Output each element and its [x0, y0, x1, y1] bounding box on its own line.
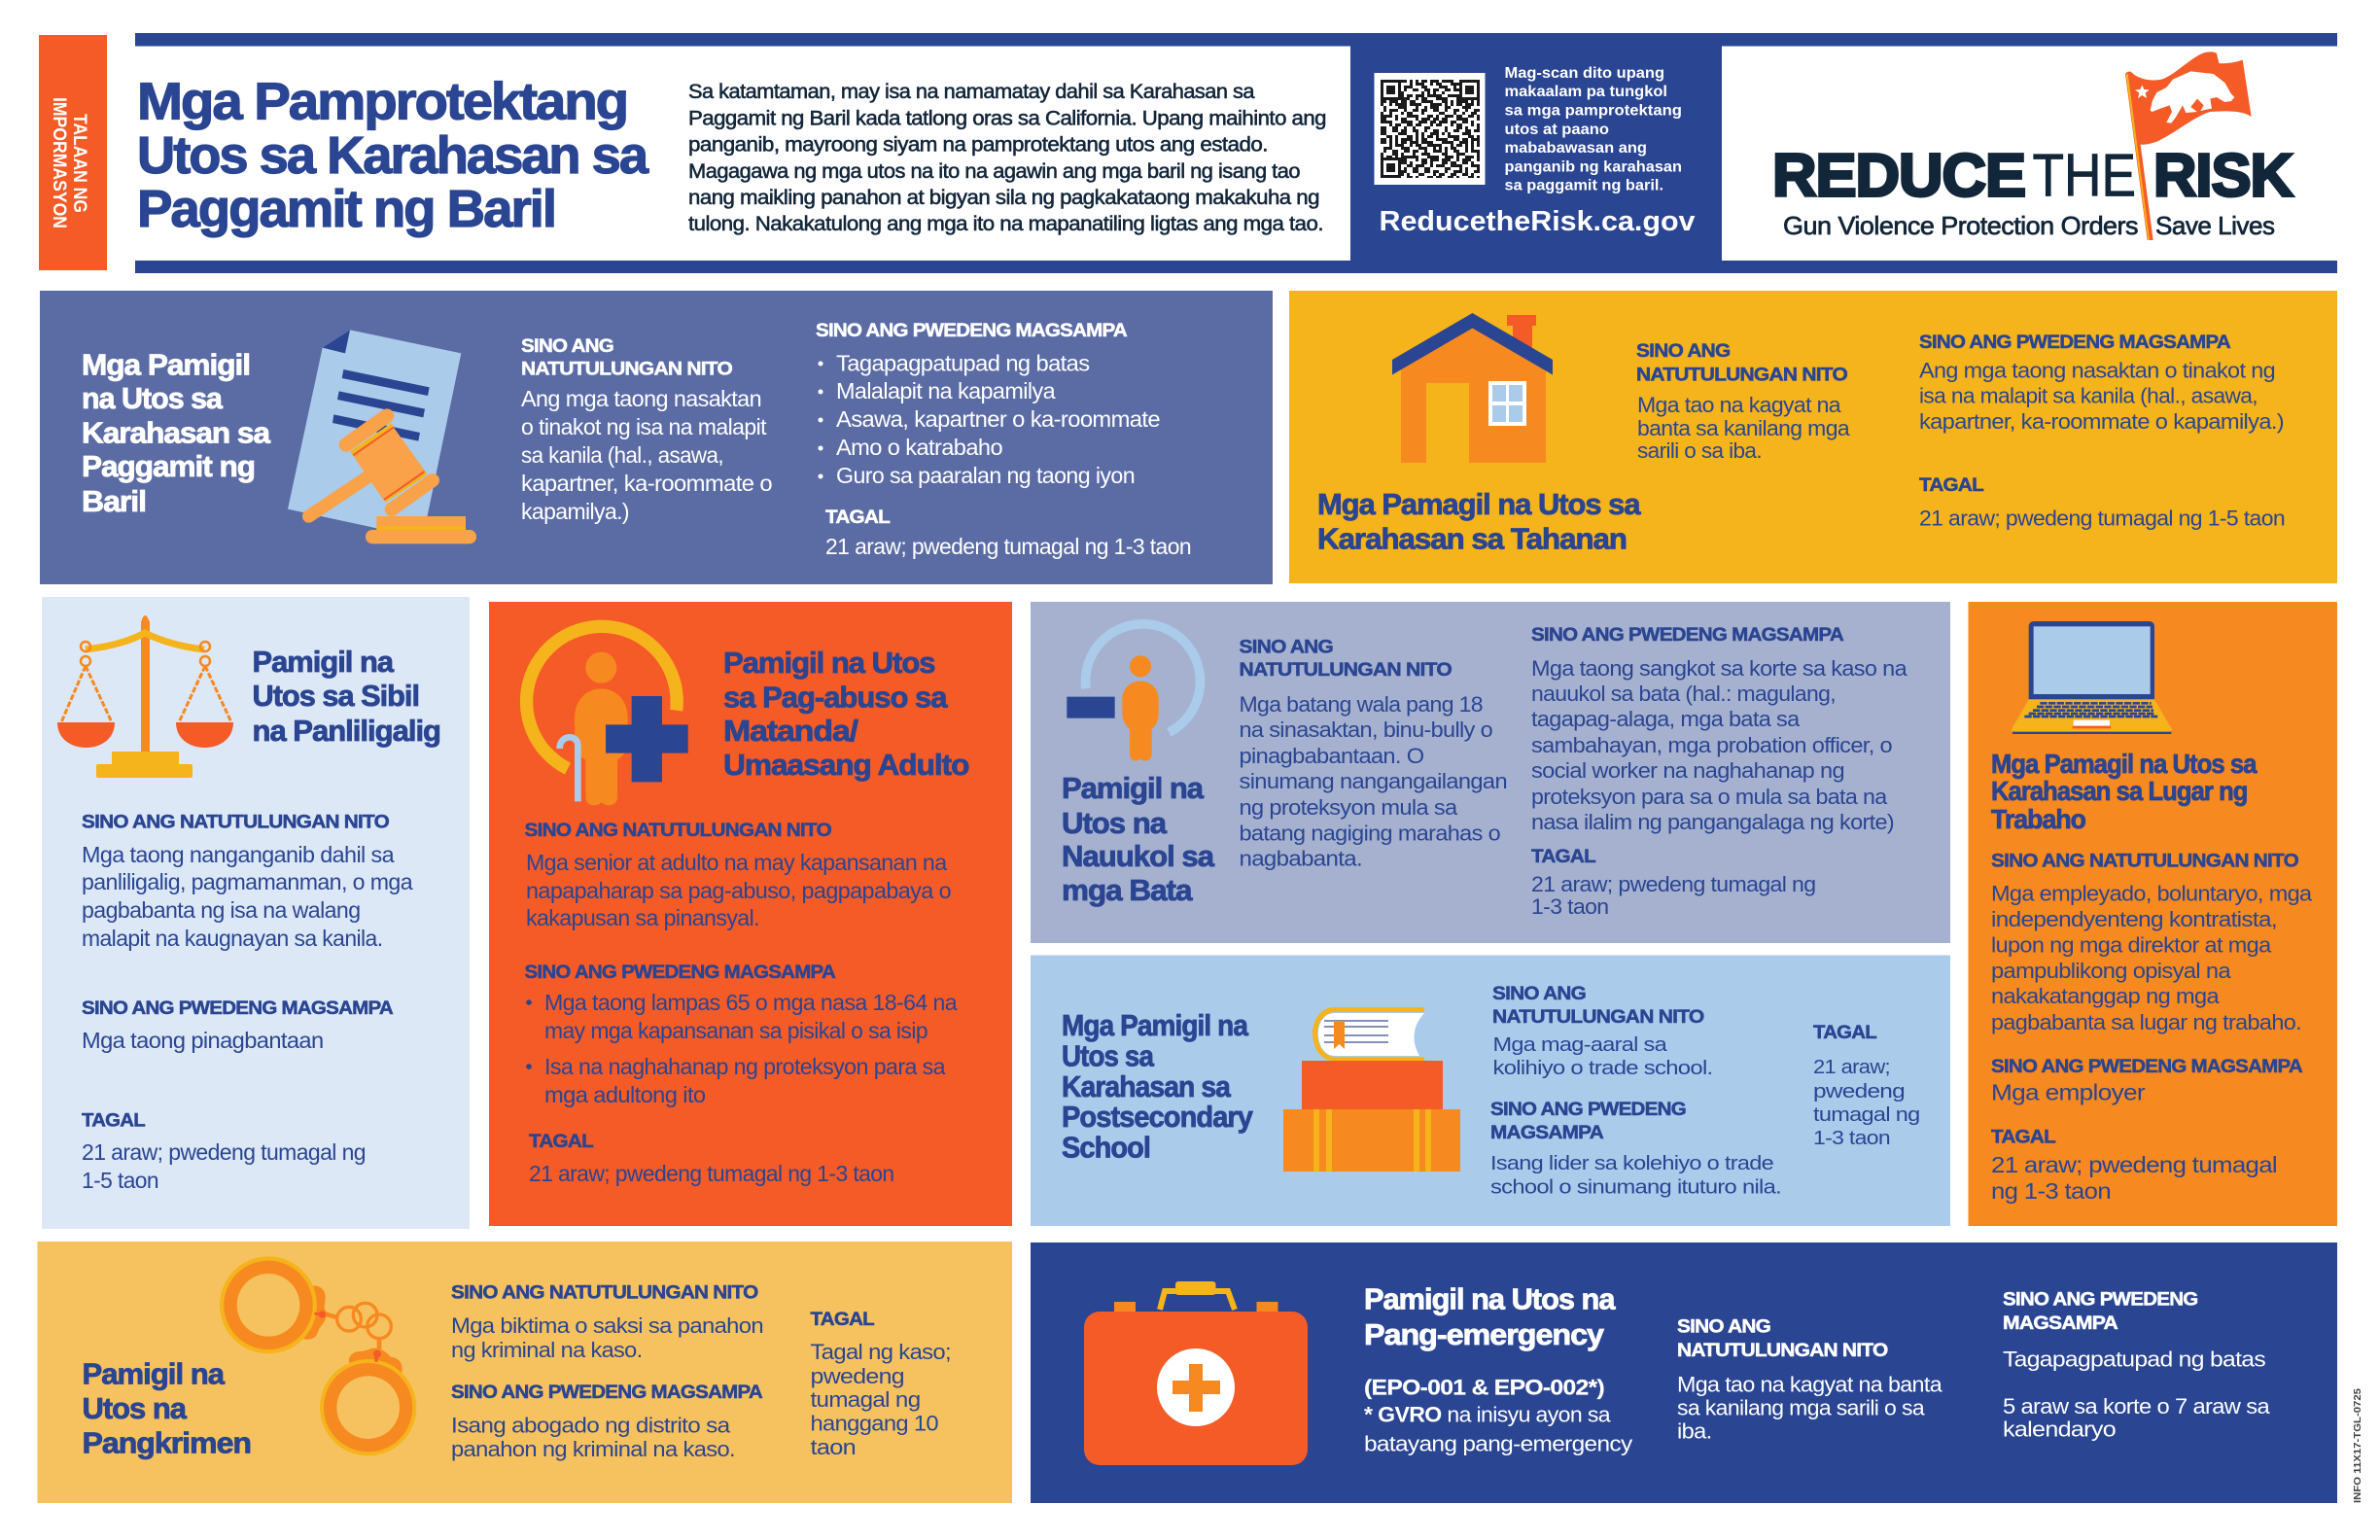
who it helps: ng proteksyon mula sa — [1239, 795, 1458, 820]
QR instructions: makaalam pa tungkol — [1505, 84, 1667, 100]
who can file: MAGSAMPA — [1490, 1122, 1604, 1143]
tab: document type: IMPORMASYON — [49, 97, 69, 228]
duration: pwedeng — [811, 1364, 904, 1388]
duration: Tagal ng kaso; — [811, 1340, 951, 1364]
duration: TAGAL — [1919, 474, 1984, 496]
panel: QR call to action — [1350, 33, 1722, 273]
panel: juvenile restraining order — [1031, 602, 1950, 943]
icon: document and gavel — [288, 330, 476, 543]
duration: TAGAL — [82, 1110, 146, 1132]
who can file — [2003, 1289, 2266, 1371]
website URL: ReducetheRisk.ca.gov — [1379, 206, 1696, 237]
duration — [811, 1309, 951, 1459]
duration — [1919, 474, 2285, 531]
icon: handcuffs — [220, 1256, 416, 1455]
duration: taon — [811, 1435, 856, 1459]
duration: TAGAL — [825, 507, 891, 528]
heading: Pamigil na — [253, 645, 395, 679]
who it helps: Mga taong nanganganib dahil sa — [82, 842, 396, 867]
duration: pwedeng — [1813, 1080, 1905, 1102]
who can file — [1531, 624, 1908, 834]
who can file — [816, 320, 1161, 488]
QR instructions — [1505, 65, 1682, 194]
who can file: sambahayan, mga probation officer, o — [1531, 733, 1892, 757]
who it helps: sa kanilang mga sarili o sa — [1677, 1396, 1925, 1419]
tab: document type: TALAAN NG — [69, 114, 89, 213]
who it helps: Mga biktima o saksi sa panahon — [451, 1313, 763, 1338]
duration: tumagal ng — [1813, 1103, 1920, 1126]
heading — [723, 646, 969, 782]
duration: 1-3 taon — [1813, 1127, 1890, 1149]
panel: gun violence restraining order — [40, 291, 1273, 584]
who can file: Mga taong pinagbantaan — [82, 1028, 323, 1053]
intro text: panganib, mayroong siyam na pamprotektang utos ang estado. — [688, 134, 1268, 156]
icon: child figure — [1067, 624, 1201, 761]
icon: scales — [57, 615, 233, 778]
duration: 21 araw; pwedeng tumagal ng 1-3 taon — [529, 1161, 894, 1186]
who it helps: Mga senior at adulto na may kapansanan na — [526, 850, 948, 875]
duration: 1-3 taon — [1531, 894, 1608, 919]
duration: ng 1-3 taon — [1991, 1178, 2111, 1204]
heading: Utos sa Sibil — [253, 679, 419, 713]
heading — [1062, 771, 1215, 907]
who can file: social worker na naghahanap ng — [1531, 758, 1844, 783]
heading: Utos na — [1062, 806, 1168, 840]
heading: Pamigil na Utos na — [1364, 1281, 1616, 1316]
heading: Karahasan sa Lugar ng — [1991, 776, 2248, 806]
who it helps: Mga empleyado, boluntaryo, mga — [1991, 881, 2313, 906]
logo wordmark: REDUCE — [1772, 142, 2025, 210]
heading: Karahasan sa Tahanan — [1317, 521, 1627, 556]
who it helps — [1677, 1316, 1942, 1443]
who it helps — [525, 820, 952, 930]
who can file: kapartner, ka-roommate o kapamilya.) — [1919, 409, 2284, 434]
heading — [253, 645, 440, 748]
duration — [1531, 846, 1816, 919]
note: form numbers: * GVRO na inisyu ayon sa — [1364, 1402, 1611, 1427]
who it helps — [521, 335, 773, 524]
who can file: MAGSAMPA — [2003, 1312, 2118, 1334]
QR instructions: sa paggamit ng baril. — [1505, 177, 1663, 194]
who it helps: napapaharap sa pag-abuso, pagpapabaya o — [526, 878, 952, 903]
panel: emergency protective order — [1031, 1242, 2337, 1503]
heading — [1062, 1008, 1254, 1165]
panel: workplace violence restraining order — [1968, 602, 2337, 1226]
heading: Pangkrimen — [82, 1425, 251, 1460]
duration — [82, 1110, 366, 1193]
logo tagline — [1783, 211, 2275, 240]
who it helps: malapit na kaugnayan sa kanila. — [82, 926, 383, 951]
heading — [1991, 749, 2258, 834]
intro text: Magagawa ng mga utos na ito na agawin ang mga baril ng isang tao — [688, 160, 1300, 183]
header frame — [135, 33, 2337, 273]
QR instructions: panganib ng karahasan — [1505, 159, 1682, 175]
who it helps: NATUTULUNGAN NITO — [521, 358, 733, 379]
who can file: Tagapagpatupad ng batas — [836, 350, 1089, 375]
duration: TAGAL — [811, 1309, 875, 1330]
who it helps: SINO ANG — [521, 335, 613, 357]
who it helps: Ang mga taong nasaktan — [521, 386, 761, 411]
who can file: SINO ANG PWEDENG — [1490, 1099, 1686, 1120]
who can file: Tagapagpatupad ng batas — [2003, 1348, 2266, 1371]
heading: Pamigil na Utos — [723, 646, 935, 680]
who can file: SINO ANG PWEDENG MAGSAMPA — [1991, 1056, 2303, 1077]
who can file: SINO ANG PWEDENG MAGSAMPA — [1919, 332, 2231, 353]
who it helps — [451, 1281, 763, 1362]
who it helps: NATUTULUNGAN NITO — [1492, 1006, 1704, 1028]
who can file: mga adultong ito — [544, 1082, 706, 1107]
who it helps — [1492, 983, 1713, 1079]
heading: Utos na — [82, 1391, 188, 1425]
who it helps: SINO ANG NATUTULUNGAN NITO — [82, 811, 390, 832]
panel: postsecondary school restraining order — [1031, 955, 1950, 1226]
who can file — [1490, 1099, 1781, 1198]
who it helps: pinagbabantaan. O — [1239, 744, 1424, 768]
who it helps: independyenteng kontratista, — [1991, 907, 2277, 931]
title: Paggamit ng Baril — [137, 180, 555, 238]
who can file: Asawa, kapartner o ka-roommate — [836, 406, 1161, 432]
duration — [2003, 1394, 2270, 1441]
who it helps: kapartner, ka-roommate o — [521, 471, 773, 496]
who it helps: SINO ANG — [1677, 1316, 1770, 1338]
who can file: SINO ANG PWEDENG MAGSAMPA — [82, 998, 394, 1019]
note: form numbers: (EPO-001 & EPO-002*) — [1364, 1375, 1604, 1400]
title: Utos sa Karahasan sa — [137, 126, 649, 185]
logo wordmark: RISK — [2153, 142, 2293, 210]
QR instructions: mababawasan ang — [1505, 140, 1647, 157]
who it helps: lupon ng mga direktor at mga — [1991, 933, 2272, 957]
intro text — [688, 81, 1326, 235]
who can file — [1919, 332, 2284, 434]
who it helps: SINO ANG — [1636, 340, 1731, 362]
heading: Karahasan sa — [1062, 1069, 1232, 1103]
footer: document code: INFO 11X17-TGL-0725 — [2353, 1388, 2363, 1503]
who it helps: SINO ANG — [1492, 983, 1586, 1004]
who can file: Mga taong lampas 65 o mga nasa 18-64 na — [544, 990, 958, 1015]
logo wordmark — [1772, 142, 2293, 210]
intro text: Paggamit ng Baril kada tatlong oras sa California. Upang maihinto ang — [688, 107, 1326, 130]
icon: elder with cane and cross — [527, 626, 688, 805]
duration: tumagal ng — [811, 1387, 920, 1412]
heading: Baril — [82, 484, 146, 518]
who can file: tagapag-alaga, mga bata sa — [1531, 707, 1801, 731]
logo: Reduce the Risk — [1772, 52, 2293, 240]
who can file — [525, 962, 958, 1107]
who it helps: pagbabanta ng isa na walang — [82, 897, 360, 923]
panel: criminal protective order — [37, 1242, 1012, 1503]
note: form numbers — [1364, 1375, 1632, 1456]
who can file: SINO ANG PWEDENG MAGSAMPA — [1531, 624, 1844, 646]
duration: hanggang 10 — [811, 1412, 938, 1435]
who can file: Isa na naghahanap ng proteksyon para sa — [544, 1054, 947, 1079]
who can file: school o sinumang ituturo nila. — [1490, 1176, 1781, 1198]
who can file: SINO ANG PWEDENG MAGSAMPA — [451, 1382, 763, 1403]
heading: Pamigil na — [1062, 771, 1205, 805]
note: form numbers: batayang pang-emergency — [1364, 1431, 1632, 1456]
duration: 5 araw sa korte o 7 araw sa — [2003, 1394, 2270, 1418]
who it helps: nagbabanta. — [1239, 846, 1362, 871]
who it helps — [82, 811, 413, 951]
who can file: panahon ng kriminal na kaso. — [451, 1437, 735, 1461]
who it helps — [1991, 850, 2313, 1034]
duration: 21 araw; pwedeng tumagal ng — [82, 1139, 366, 1165]
duration: 21 araw; pwedeng tumagal ng — [1531, 872, 1816, 896]
QR code — [1375, 73, 1486, 185]
who it helps: Mga mag-aaral sa — [1493, 1033, 1667, 1056]
heading — [82, 348, 271, 518]
who can file: Mga employer — [1991, 1079, 2146, 1104]
duration: TAGAL — [1991, 1126, 2056, 1147]
heading: Matanda/ — [723, 714, 859, 748]
who can file: may mga kapansanan sa pisikal o sa isip — [544, 1018, 928, 1043]
duration: TAGAL — [1531, 846, 1596, 867]
who it helps: NATUTULUNGAN NITO — [1636, 364, 1848, 385]
heading: mga Bata — [1062, 873, 1193, 907]
heading: na Panliligalig — [253, 714, 440, 748]
who it helps: sarili o sa iba. — [1637, 438, 1762, 463]
who it helps — [1239, 636, 1507, 871]
who can file: SINO ANG PWEDENG MAGSAMPA — [816, 320, 1128, 341]
duration: 1-5 taon — [82, 1168, 158, 1193]
who can file: Guro sa paaralan ng taong iyon — [836, 463, 1135, 488]
heading: na Utos sa — [82, 381, 224, 415]
who can file: SINO ANG PWEDENG — [2003, 1289, 2197, 1311]
who it helps: o tinakot ng isa na malapit — [521, 414, 767, 439]
heading: Pang-emergency — [1364, 1317, 1605, 1351]
who can file: Isang abogado ng distrito sa — [451, 1414, 731, 1437]
who it helps: pampublikong opisyal na — [1991, 959, 2231, 983]
icon: laptop — [2012, 621, 2172, 734]
QR instructions: sa mga pamprotektang — [1505, 103, 1682, 119]
heading: School — [1062, 1130, 1150, 1165]
heading: Postsecondary — [1062, 1100, 1254, 1134]
who can file: nauukol sa bata (hal.: magulang, — [1531, 682, 1836, 706]
who it helps: sa kanila (hal., asawa, — [521, 442, 723, 468]
QR instructions: Mag-scan dito upang — [1505, 65, 1664, 82]
who it helps: SINO ANG NATUTULUNGAN NITO — [451, 1281, 758, 1303]
duration — [529, 1131, 894, 1186]
who can file — [82, 998, 394, 1053]
who can file — [451, 1382, 763, 1461]
who can file: Isang lider sa kolehiyo o trade — [1490, 1152, 1773, 1174]
who it helps: sinumang nangangailangan — [1239, 769, 1507, 793]
who it helps: kapamilya.) — [521, 499, 629, 524]
duration: 21 araw; pwedeng tumagal ng 1-3 taon — [825, 534, 1191, 559]
duration — [825, 507, 1191, 559]
who can file: Mga taong sangkot sa korte sa kaso na — [1531, 656, 1908, 681]
who it helps: NATUTULUNGAN NITO — [1239, 659, 1452, 681]
icon: first aid bag — [1084, 1281, 1308, 1465]
who can file: proteksyon para sa o mula sa bata na — [1531, 785, 1888, 809]
duration: 21 araw; pwedeng tumagal ng 1-5 taon — [1919, 506, 2285, 531]
intro text: tulong. Nakakatulong ang mga ito na mapanatiling ligtas ang mga tao. — [688, 213, 1323, 235]
who it helps: panliligalig, pagmamanman, o mga — [82, 869, 413, 894]
heading: Paggamit ng — [82, 449, 255, 483]
duration: kalendaryo — [2003, 1418, 2116, 1441]
heading — [1364, 1281, 1616, 1351]
title: Mga Pamprotektang — [137, 72, 627, 130]
who can file: nasa ilalim ng pangangalaga ng korte) — [1531, 810, 1894, 834]
who it helps: kolihiyo o trade school. — [1493, 1057, 1713, 1079]
heading: Mga Pamagil na Utos sa — [1991, 749, 2258, 779]
who it helps: Mga tao na kagyat na — [1637, 393, 1841, 417]
icon: house — [1392, 313, 1553, 463]
heading: Pamigil na — [82, 1357, 226, 1390]
who it helps: pagbabanta sa lugar ng trabaho. — [1991, 1010, 2301, 1034]
who it helps: na sinasaktan, binu-bully o — [1239, 718, 1492, 742]
duration: 21 araw; — [1813, 1056, 1890, 1078]
duration: TAGAL — [1813, 1022, 1877, 1043]
title — [137, 72, 649, 238]
who it helps: kakapusan sa pinansyal. — [526, 905, 759, 930]
heading: Karahasan sa — [82, 416, 271, 449]
who it helps: batang nagiging marahas o — [1239, 821, 1500, 846]
who it helps: nakakatanggap ng mga — [1991, 984, 2220, 1008]
logo wordmark: THE — [2032, 142, 2136, 210]
who it helps: Mga batang wala pang 18 — [1239, 692, 1483, 717]
logo tagline: Save Lives — [2155, 211, 2275, 240]
logo tagline: Gun Violence Protection Orders — [1783, 211, 2139, 240]
intro text: Sa katamtaman, may isa na namamatay dahil sa Karahasan sa — [688, 81, 1255, 103]
who can file: Ang mga taong nasaktan o tinakot ng — [1919, 358, 2275, 383]
heading: Mga Pamagil na Utos sa — [1317, 487, 1641, 521]
who can file: Malalapit na kapamilya — [836, 378, 1057, 403]
heading: Mga Pamigil na — [1062, 1008, 1249, 1042]
who it helps — [1636, 340, 1850, 463]
who it helps: iba. — [1677, 1419, 1711, 1443]
who it helps: ng kriminal na kaso. — [451, 1338, 642, 1362]
duration: 21 araw; pwedeng tumagal — [1991, 1152, 2277, 1177]
who it helps: SINO ANG NATUTULUNGAN NITO — [1991, 850, 2299, 871]
heading: Umaasang Adulto — [723, 748, 969, 782]
who can file: Amo o katrabaho — [836, 435, 1003, 460]
who it helps: banta sa kanilang mga — [1637, 416, 1850, 440]
heading: Utos sa — [1062, 1038, 1155, 1073]
duration: TAGAL — [529, 1131, 594, 1152]
heading: Nauukol sa — [1062, 839, 1215, 873]
who it helps: NATUTULUNGAN NITO — [1677, 1340, 1888, 1361]
panel: civil harassment restraining order — [42, 597, 470, 1229]
duration — [1991, 1126, 2277, 1204]
who it helps: SINO ANG NATUTULUNGAN NITO — [525, 820, 832, 841]
heading — [1317, 487, 1641, 556]
who can file: SINO ANG PWEDENG MAGSAMPA — [525, 962, 836, 983]
panel: elder abuse restraining order — [489, 602, 1012, 1226]
QR instructions: utos at paano — [1505, 122, 1609, 138]
who it helps: SINO ANG — [1239, 636, 1333, 657]
heading: Trabaho — [1991, 804, 2086, 834]
icon: flag with bear — [2125, 52, 2252, 240]
panel: domestic violence restraining order — [1289, 291, 2337, 583]
intro text: nang maikling panahon at bigyan sila ng pagkakataong makakuha ng — [688, 187, 1319, 209]
who can file — [1991, 1056, 2303, 1104]
duration — [1813, 1022, 1920, 1149]
heading: sa Pag-abuso sa — [723, 681, 948, 714]
tab: document type — [39, 35, 107, 270]
heading — [82, 1357, 251, 1460]
who can file: isa na malapit sa kanila (hal., asawa, — [1919, 383, 2258, 408]
heading: Mga Pamigil — [82, 348, 250, 381]
who it helps: Mga tao na kagyat na banta — [1677, 1373, 1942, 1396]
icon: stack of books — [1283, 1007, 1460, 1172]
